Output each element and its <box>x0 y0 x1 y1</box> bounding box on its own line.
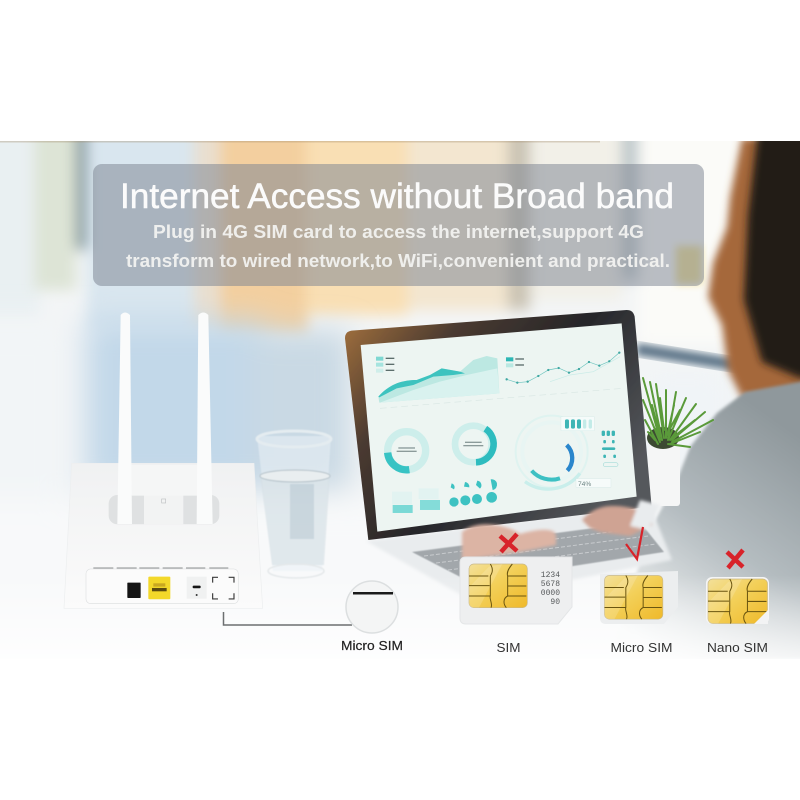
label: nano SIM: Nano SIM <box>707 641 768 655</box>
subtitle line 2: transform to wired network,to WiFi,convenient and practical. <box>126 251 670 271</box>
laptop base and keyboard <box>370 514 672 593</box>
red check on micro SIM <box>626 527 643 559</box>
white fade of lower scene <box>647 586 800 659</box>
percent callout: 74% <box>578 481 591 488</box>
red cross on nano SIM <box>727 550 743 568</box>
nano SIM card <box>706 577 769 624</box>
percent callout <box>576 479 611 488</box>
laptop screen <box>361 323 637 532</box>
card number: 90 <box>550 598 560 607</box>
label: SIM: SIM <box>496 641 520 655</box>
dark window sill band <box>636 343 736 371</box>
SIM slot magnifier <box>346 581 398 633</box>
laptop <box>345 310 652 540</box>
people pictogram panel <box>561 417 618 467</box>
blurred lower wall and table <box>72 302 360 499</box>
background photo scene <box>0 141 800 658</box>
hair of woman <box>708 130 800 398</box>
donut chart left <box>388 432 426 470</box>
router <box>64 312 263 608</box>
line chart on screen <box>380 351 623 408</box>
micro SIM card <box>600 571 678 624</box>
subtitle line 1: Plug in 4G SIM card to access the internet,support 4G <box>153 222 644 242</box>
headline panel <box>93 164 704 286</box>
label: micro SIM slot: Micro SIM <box>341 639 403 653</box>
SIM card <box>460 557 572 624</box>
blurred window and curtains <box>0 141 643 338</box>
small pies and bars <box>392 479 497 513</box>
red cross on SIM <box>500 534 517 552</box>
connector line <box>224 612 352 625</box>
area chart on screen <box>376 356 499 403</box>
antenna mount <box>108 495 220 524</box>
router body <box>64 463 263 608</box>
port panel <box>86 568 238 604</box>
laptop lid <box>345 310 652 540</box>
SIM slot brackets <box>213 577 234 599</box>
sweater of woman <box>636 380 800 656</box>
card number <box>541 572 560 604</box>
potted plant <box>643 378 713 506</box>
water glass <box>257 431 331 578</box>
ethernet port <box>148 577 170 599</box>
left antenna <box>117 312 132 524</box>
right antenna <box>197 312 213 524</box>
donut chart right <box>455 426 494 462</box>
yellow tint behind panel <box>676 246 702 284</box>
title: Internet Access without Broad band <box>120 177 674 216</box>
card number: 5678 <box>541 580 560 589</box>
power port <box>127 583 141 598</box>
label: micro SIM: Micro SIM <box>610 641 672 655</box>
card number: 1234 <box>541 571 560 580</box>
hands on keyboard <box>462 500 660 560</box>
top edge strip <box>0 141 600 142</box>
card number: 0000 <box>541 589 560 598</box>
reset port <box>187 577 207 599</box>
radial gauge <box>516 416 588 489</box>
